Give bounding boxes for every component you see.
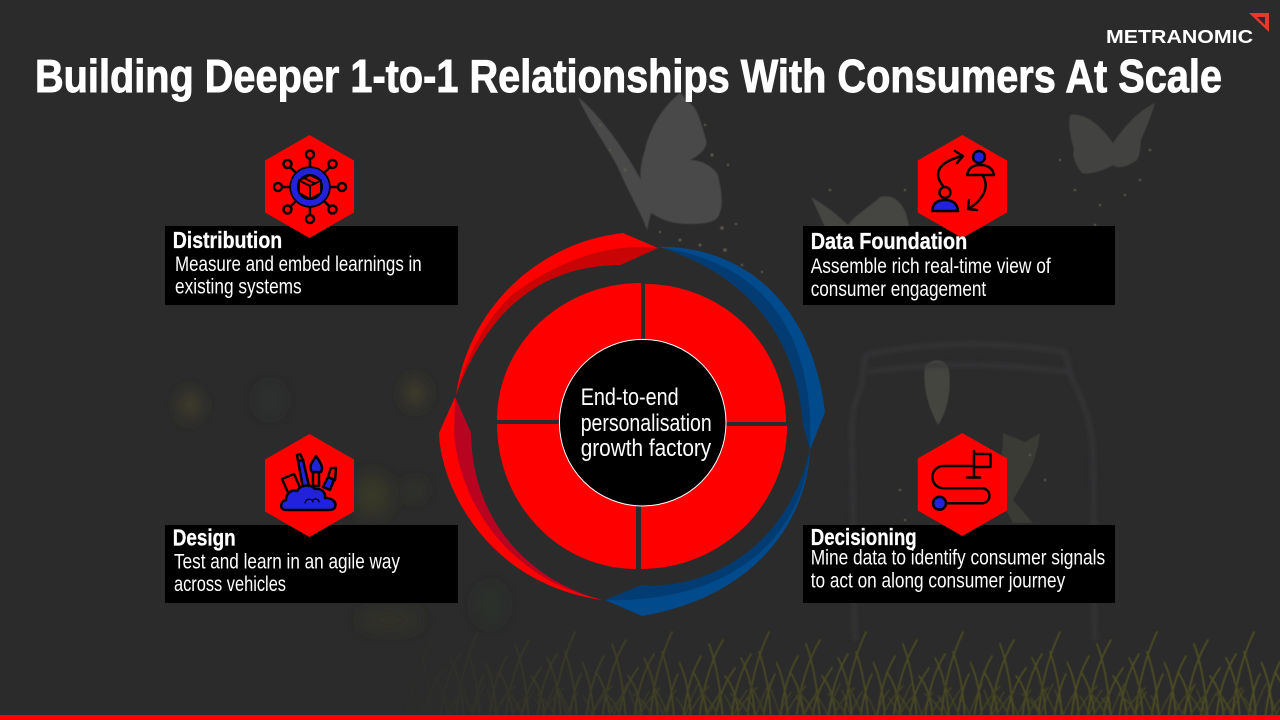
hexagon [265,434,354,537]
outer ring arrows [439,233,825,616]
description: Test and learn in an agile way [174,550,400,574]
panel: decisioning [803,433,1115,603]
arrow: red top [456,233,658,395]
description [174,550,400,596]
grass [494,631,1280,715]
bottom bar [0,715,1280,720]
butterflies [578,93,1155,523]
description [811,255,1051,301]
panel: distribution [165,135,458,305]
hexagon [918,433,1007,536]
sparkles [599,124,1151,521]
description: Measure and embed learnings in [175,253,422,276]
logo [1106,13,1269,47]
arrow: blue bottom [605,450,810,616]
arrow: blue right [658,247,825,450]
jar [852,344,1095,640]
center text: personalisation [581,410,712,437]
cycle diagram [439,233,825,616]
hexagon [918,135,1007,238]
logo mark [1249,13,1269,32]
icon: design tools [281,454,336,510]
quadrant bottom left [497,424,636,569]
center circle [559,339,726,506]
arrow: red left [439,397,603,600]
panel: data foundation [803,135,1115,305]
icon: network box [274,150,346,223]
description: existing systems [175,276,302,298]
hexagon [265,135,354,238]
center text [581,384,712,462]
description: across vehicles [174,573,286,596]
ring quadrants [497,283,787,569]
description: consumer engagement [811,278,986,301]
icon: consumers cycle [932,151,994,211]
description [811,546,1105,592]
heading: Design [173,524,236,550]
heading: Decisioning [811,524,917,550]
description: Assemble rich real-time view of [811,255,1051,278]
icon: journey flag [932,451,990,510]
heading: Distribution [173,227,282,253]
logo wordmark: METRANOMIC [1106,27,1253,47]
description: Mine data to identify consumer signals [811,546,1105,570]
quadrant bottom right [641,426,787,569]
description [175,253,422,298]
quadrant top right [645,284,786,422]
panel: design [165,434,458,603]
bokeh fireflies [182,381,502,629]
heading: Data Foundation [811,228,967,254]
center text: growth factory [581,435,711,462]
description: to act on along consumer journey [811,570,1066,592]
center text: End-to-end [581,384,679,411]
quadrant top left [497,283,641,420]
background [179,93,1280,715]
